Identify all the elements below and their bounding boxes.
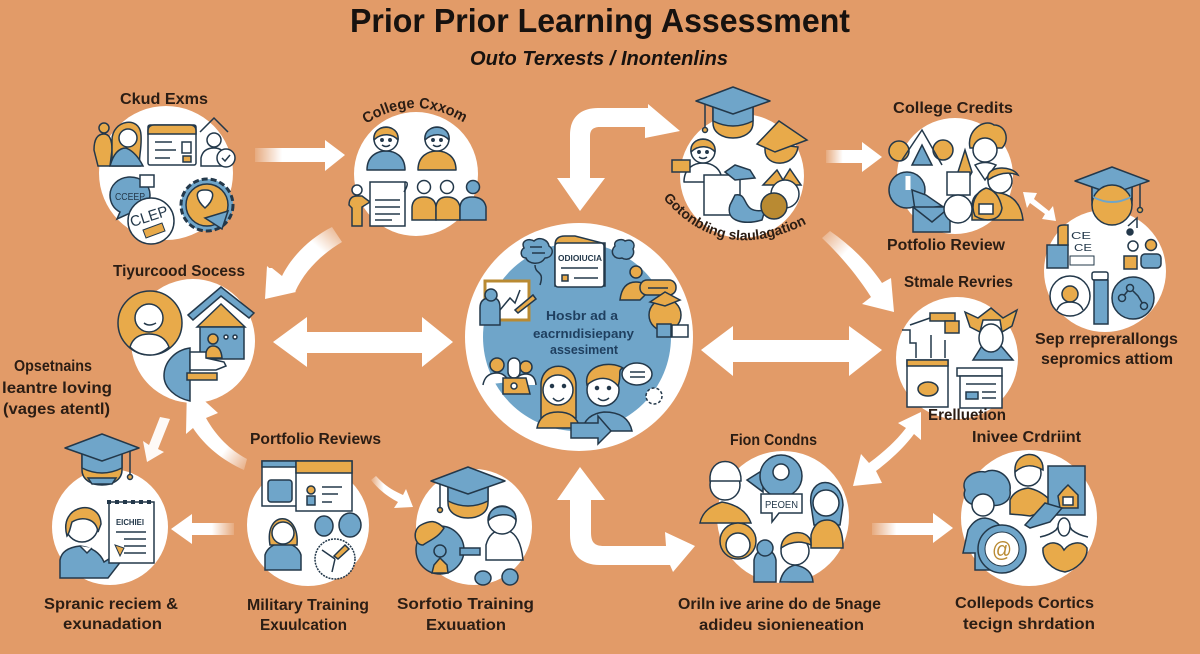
icon: fox eared person xyxy=(965,308,1017,360)
icon: group of three xyxy=(412,180,486,220)
icon: two students xyxy=(367,127,456,170)
arrow: fion and evaluation double xyxy=(853,412,921,486)
arrow: credits and sep double xyxy=(1023,192,1056,221)
label: Orin ive arine: Oriln ive arine do de 5nage xyxy=(678,596,881,613)
arrow: military to spranic xyxy=(171,514,234,544)
icon: card text: ODIOIUCIA xyxy=(558,254,602,263)
disc xyxy=(717,451,849,583)
panel: Fion Condns xyxy=(700,451,849,583)
icon: left group xyxy=(483,358,536,394)
arrow: top U arrow xyxy=(557,104,680,211)
icon: at sign badge: @ xyxy=(992,537,1012,562)
label: Exuulcation: Exuulcation xyxy=(260,617,347,634)
label: College Cxxom curved: College Cxxom xyxy=(362,98,466,122)
icon: wings and heart xyxy=(1040,518,1088,572)
arrow: top to credits xyxy=(826,142,882,172)
panel: Sorfotio Training xyxy=(415,467,532,585)
icon: gear xyxy=(181,179,233,231)
label: Sorfotio Training: Sorfotio Training xyxy=(397,596,534,613)
arrow: center and stmale double xyxy=(701,326,882,376)
icon: man with document xyxy=(1010,454,1085,528)
disc xyxy=(961,450,1097,586)
label: exunadation: exunadation xyxy=(63,616,162,633)
label: Sep rreprerallongs: Sep rreprerallongs xyxy=(1035,331,1178,348)
arrow: bottom U arrow xyxy=(557,467,695,572)
arrows xyxy=(143,104,1056,572)
icon: envelope and exclamation xyxy=(889,172,972,232)
panel: Stmale Revries xyxy=(896,297,1018,419)
icon: child xyxy=(486,506,523,560)
icon: books and CE text: CE xyxy=(1074,243,1092,254)
icon: graduation cap xyxy=(65,434,139,485)
disc xyxy=(1044,210,1166,332)
arrow: opsetnains to cap xyxy=(143,417,170,462)
icon: molecule circle xyxy=(1112,277,1154,319)
panel: College Cxxom xyxy=(349,112,486,236)
icon: house xyxy=(188,287,254,359)
icon: exam card xyxy=(555,236,605,287)
disc xyxy=(680,114,804,238)
subtitle: Outo Terxests / Inontenlins xyxy=(470,48,728,70)
icon: women and man bottom xyxy=(720,523,813,582)
icon: portrait xyxy=(1050,276,1090,316)
icon: whiteboard teacher xyxy=(480,281,536,325)
label: Fion Condns: Fion Condns xyxy=(730,432,817,449)
hub text xyxy=(533,308,635,357)
label: Inivee Crdrint: Inivee Crdriint xyxy=(972,429,1082,446)
icon: woman xyxy=(537,366,580,428)
icon: PEOEN speech xyxy=(761,494,802,522)
label: Tiyurcood Socess: Tiyurcood Socess xyxy=(113,263,245,280)
disc xyxy=(897,118,1013,234)
panel: central assessment hub xyxy=(465,223,693,451)
label: Potfolio Review: Potfolio Review xyxy=(887,237,1006,254)
icon: note and camera xyxy=(1124,218,1161,269)
icon: pencil cup xyxy=(947,150,972,195)
icon: graduation cap xyxy=(1075,167,1149,225)
icon: wheel xyxy=(415,522,480,574)
icon: certificate xyxy=(107,502,155,563)
hub line 2: eacrnıdisiepany xyxy=(533,326,635,341)
icon: speech bubble with CLEP: CCEEP xyxy=(115,192,145,203)
icon: small person xyxy=(349,185,370,226)
icon: gloves xyxy=(475,569,518,585)
label: Portfolio Reviews: Portfolio Reviews xyxy=(250,431,381,448)
icon: man xyxy=(571,364,632,444)
icon: student with hair xyxy=(94,122,143,166)
icon: exam sheet xyxy=(148,125,196,165)
label: adideu sionieneation: adideu sionieneation xyxy=(699,617,864,634)
label: leantre loving: leantre loving xyxy=(2,380,112,397)
panel: Sep rreprerallongs xyxy=(1044,167,1166,332)
icon: browser windows xyxy=(262,461,352,511)
icon: CLEP badge xyxy=(128,198,174,244)
icon: circuit diagram xyxy=(902,313,959,358)
panel: Tiyurcood Socess xyxy=(118,279,255,403)
label: Stmale Revries: Stmale Revries xyxy=(904,274,1013,291)
icon: books and CE text: CE xyxy=(1071,231,1091,242)
icon: triangle and circles xyxy=(889,130,953,165)
icon: woman xyxy=(265,519,301,570)
icon: speech bubble and gear xyxy=(622,363,662,404)
icon: speech and house xyxy=(620,266,688,337)
icon: chat bubbles xyxy=(315,513,361,537)
disc xyxy=(247,464,369,586)
label: Spranic reciem: Spranic reciem & xyxy=(44,596,178,613)
arrow: portfolio to success xyxy=(186,385,247,470)
icon: web page xyxy=(957,368,1002,408)
arrow: exams to college xyxy=(255,140,345,171)
hub blue disc xyxy=(483,243,671,431)
icon: graduation cap xyxy=(696,87,770,138)
icon: gold cap xyxy=(757,121,807,163)
title: Prior Prior Learning Assessment xyxy=(350,2,850,39)
icon: blue portrait circle xyxy=(747,455,802,497)
icon: triangles and cookie xyxy=(761,169,801,219)
label: Collepods Cortics: Collepods Cortics xyxy=(955,595,1094,612)
hub line 3: assesiment xyxy=(550,342,619,357)
label: tecign shrdation: tecign shrdation xyxy=(963,616,1095,633)
icon: man with lock xyxy=(972,168,1023,220)
icon: CLEP badge: CLEP xyxy=(128,203,170,231)
icon: books and CE text xyxy=(1047,225,1094,268)
label: College Credits: College Credits xyxy=(893,100,1013,117)
arrow: military to sorfotio xyxy=(371,476,413,508)
icon: speech bubble with CLEP xyxy=(110,175,154,219)
hub line 1: Hosbr ad a xyxy=(546,308,619,323)
disc xyxy=(99,106,233,240)
icon: face in gold circle xyxy=(118,291,182,355)
arrow: fion to credit xyxy=(872,513,953,543)
disc xyxy=(416,469,532,585)
icon: test tube xyxy=(1092,272,1108,324)
icon: teacher xyxy=(60,508,122,578)
arrow head: college to success xyxy=(265,266,296,299)
label: Erelluetion: Erelluetion xyxy=(928,407,1006,424)
panel: Spranic reciem xyxy=(52,434,168,585)
panel: Ckud Exms xyxy=(94,106,235,244)
icon: PEOEN speech: PEOEN xyxy=(765,500,798,511)
icon: graduation cap xyxy=(431,467,505,518)
icon: woman blue hair xyxy=(811,482,843,548)
icon: woman curly hair xyxy=(969,123,1006,180)
icon: student xyxy=(684,139,722,182)
panel: Military Training xyxy=(247,461,369,586)
icon: person with clock xyxy=(200,118,235,167)
icon: thought clouds xyxy=(521,239,634,285)
disc xyxy=(131,279,255,403)
label: vages atentl: (vages atentl) xyxy=(3,401,110,418)
panel: Inivee Crdrint xyxy=(961,450,1097,586)
icon: older man xyxy=(700,462,751,523)
label: Opsetnains: Opsetnains xyxy=(14,358,92,375)
disc xyxy=(52,469,168,585)
icon: specimen board xyxy=(907,360,948,407)
label: Military Training: Military Training xyxy=(247,597,369,614)
arrow: success and center double xyxy=(273,317,453,367)
disc xyxy=(354,112,478,236)
label: Exuuation: Exuuation xyxy=(426,617,506,634)
label: sepromics attiom: sepromics attiom xyxy=(1041,351,1173,368)
icon: shield and hand xyxy=(164,348,226,401)
icon: certificate: EICHIEI xyxy=(116,518,144,527)
panel: Evaluation cap circle xyxy=(672,87,807,238)
hub disc xyxy=(465,223,693,451)
panel: College Credits xyxy=(889,118,1023,234)
icon: desk and papers xyxy=(672,160,765,222)
label: Ckud Exms: Ckud Exms xyxy=(120,91,208,108)
arrow: college to success xyxy=(265,227,342,298)
label: Gotonbling slaulagation curved: Gotonbling slaulagation xyxy=(665,194,806,240)
arrow: evaluation to stmale xyxy=(822,231,894,312)
disc xyxy=(896,297,1018,419)
icon: clock xyxy=(315,539,355,579)
icon: document scroll xyxy=(370,182,407,226)
icon: curly haired person xyxy=(963,470,1010,570)
